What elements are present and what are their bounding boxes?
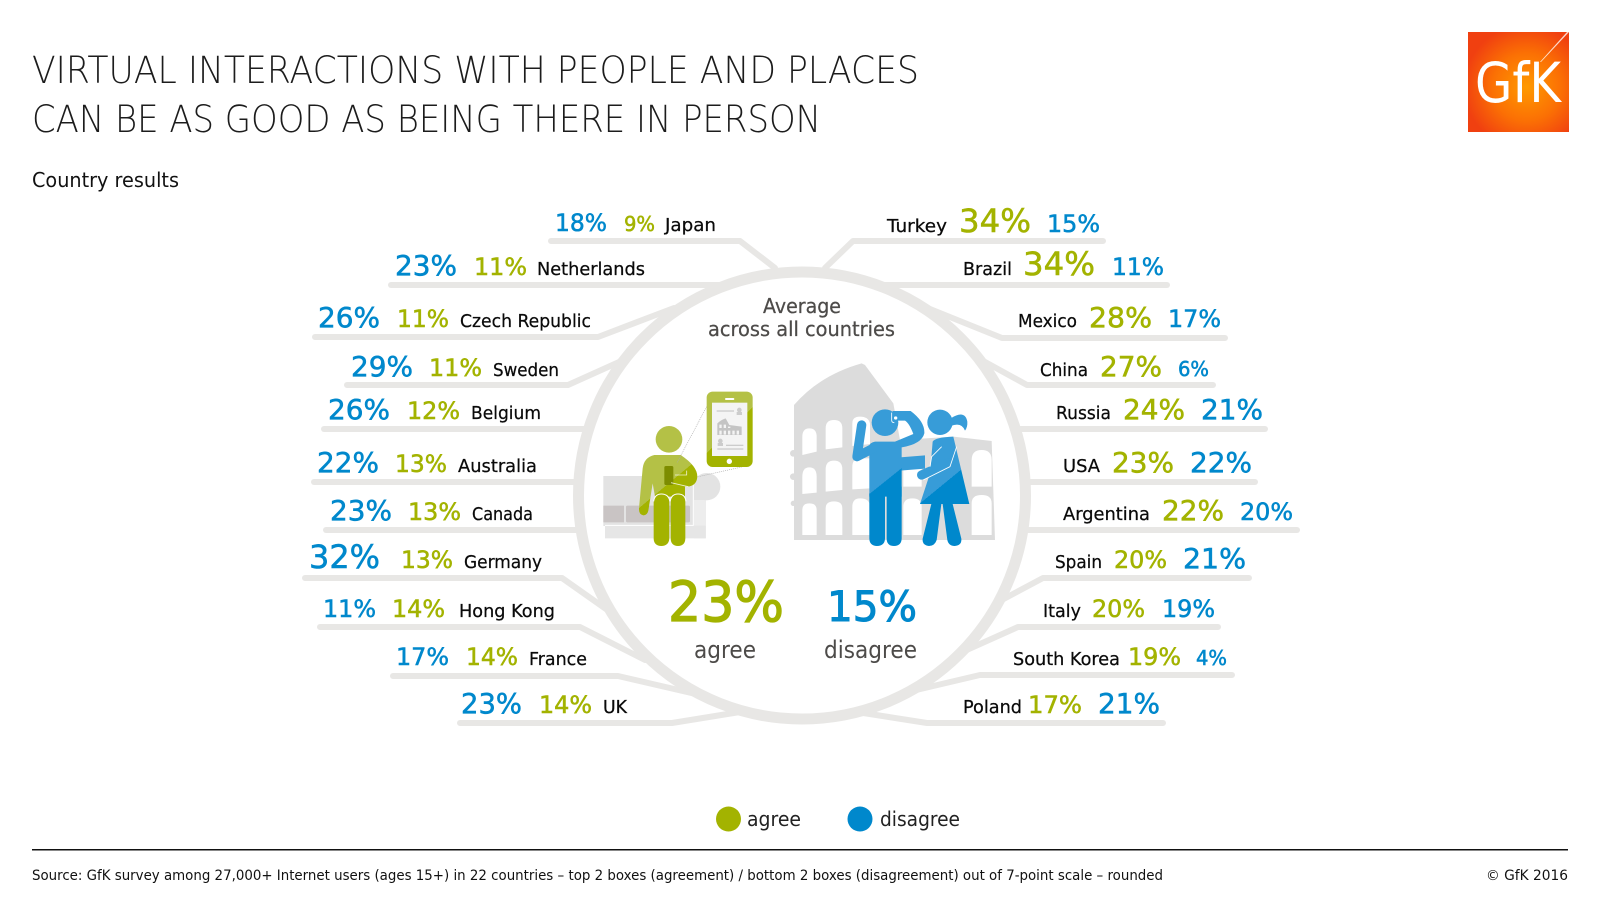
- row: USA: USA: [1063, 456, 1101, 477]
- row: Hong Kong: 14%: [392, 595, 445, 623]
- icon: person on sofa with tablet: [603, 392, 753, 546]
- stat: agree: [668, 570, 784, 664]
- row: Turkey: [825, 202, 1103, 268]
- row: Canada: [326, 494, 582, 530]
- logo: GfK: GfK: [1475, 51, 1563, 115]
- logo: GfK: [1468, 32, 1569, 132]
- icon: dotted zoom lines: [677, 407, 742, 477]
- row: Netherlands: [391, 249, 722, 285]
- circle ring: [578, 272, 1026, 719]
- row: Germany: 13%: [401, 546, 453, 574]
- stat: agree: 23%: [668, 570, 784, 634]
- icon: man taking a selfie: [857, 409, 925, 546]
- row: Netherlands: Netherlands: [537, 259, 645, 280]
- stat: disagree: [824, 582, 917, 664]
- row: China: 27%: [1100, 350, 1162, 383]
- stat: disagree: disagree: [824, 636, 917, 664]
- row: Hong Kong: 11%: [323, 595, 376, 623]
- row: Mexico: 17%: [1168, 305, 1221, 333]
- centre heading: across all countries: [708, 317, 895, 341]
- row: Czech Republic: [315, 301, 674, 337]
- row: South Korea: South Korea: [1013, 649, 1120, 670]
- row: Russia: Russia: [1056, 403, 1111, 424]
- row: Belgium: 12%: [407, 397, 460, 425]
- row: South Korea: 4%: [1196, 646, 1227, 670]
- row: France: France: [529, 649, 587, 670]
- row: Sweden: 11%: [429, 354, 482, 382]
- row: Sweden: [347, 350, 628, 385]
- row: Poland: 21%: [1098, 687, 1160, 720]
- row: Czech Republic: 26%: [318, 301, 380, 334]
- row: Argentina: [1023, 494, 1297, 530]
- row: Poland: 17%: [1028, 691, 1082, 719]
- row: Hong Kong: Hong Kong: [459, 601, 555, 622]
- title: CAN BE AS GOOD AS BEING THERE IN PERSON: [32, 98, 821, 141]
- row: France: [393, 643, 700, 695]
- row: France: 17%: [396, 643, 449, 671]
- row: Australia: 22%: [317, 446, 379, 479]
- row: Sweden: 29%: [351, 350, 413, 383]
- row: UK: 23%: [461, 687, 522, 720]
- row: Brazil: 34%: [1023, 245, 1095, 283]
- row: China: China: [1040, 360, 1088, 381]
- row: Turkey: 15%: [1047, 210, 1100, 238]
- stat: disagree: 15%: [827, 582, 917, 631]
- row: Brazil: 11%: [1112, 253, 1164, 281]
- row: Spain: Spain: [1055, 552, 1102, 573]
- row: Canada: 13%: [408, 498, 461, 526]
- title: VIRTUAL INTERACTIONS WITH PEOPLE AND PLACES: [32, 49, 919, 92]
- row: Netherlands: 11%: [474, 253, 527, 281]
- row: Australia: 13%: [395, 450, 447, 478]
- row: South Korea: [912, 643, 1232, 691]
- row: Hong Kong: [320, 595, 645, 660]
- row: Czech Republic: Czech Republic: [460, 311, 591, 332]
- row: Argentina: 22%: [1162, 494, 1224, 527]
- row: Canada: 23%: [330, 494, 392, 527]
- row: UK: 14%: [539, 691, 592, 719]
- row: Japan: [551, 209, 775, 268]
- row: Spain: 21%: [1183, 542, 1246, 575]
- icon: tablet: [707, 392, 753, 467]
- row: Italy: 20%: [1092, 595, 1145, 623]
- row: Australia: [314, 446, 580, 482]
- row: Japan: Japan: [664, 215, 716, 236]
- legend: agree: [747, 807, 801, 831]
- row: Russia: 21%: [1201, 393, 1263, 426]
- centre heading: Average: [763, 294, 841, 318]
- icon: sofa: [603, 473, 720, 538]
- row: Turkey: 34%: [959, 202, 1031, 240]
- row: Belgium: Belgium: [471, 403, 541, 424]
- row: China: 6%: [1178, 357, 1209, 381]
- row: Italy: [960, 595, 1218, 653]
- legend: [716, 806, 960, 832]
- subtitle: Country results: [32, 168, 179, 192]
- row: Canada: Canada: [472, 504, 533, 525]
- row: Brazil: Brazil: [963, 259, 1012, 280]
- row: Spain: [998, 542, 1249, 602]
- row: Poland: [857, 687, 1163, 723]
- row: USA: [1024, 446, 1255, 482]
- row: Poland: Poland: [963, 697, 1022, 718]
- row: Australia: Australia: [458, 456, 537, 477]
- legend: disagree: [880, 807, 960, 831]
- row: Mexico: [930, 301, 1225, 338]
- row: Sweden: Sweden: [493, 360, 559, 381]
- icon: woman: [920, 410, 969, 546]
- title: [32, 49, 919, 141]
- row: Germany: Germany: [464, 552, 542, 573]
- row: Argentina: Argentina: [1063, 504, 1150, 525]
- footer rule: [32, 849, 1568, 850]
- row: Mexico: Mexico: [1018, 311, 1077, 332]
- row: Belgium: 26%: [328, 393, 390, 426]
- row: Germany: [305, 538, 606, 609]
- row: USA: 23%: [1112, 446, 1174, 479]
- source note: Source: GfK survey among 27,000+ Internet users (ages 15+) in 22 countries – top 2 boxes (agreement) / bottom 2 boxes (disagreement) out of 7-point scale – rounded: [32, 868, 1163, 884]
- row: UK: [460, 687, 746, 723]
- row: Japan: 9%: [624, 212, 655, 236]
- row: USA: 22%: [1190, 446, 1252, 479]
- row: Russia: 24%: [1123, 393, 1185, 426]
- icon: tourists at the Colosseum: [790, 363, 995, 546]
- stat: agree: agree: [694, 636, 756, 664]
- row: Belgium: [324, 393, 587, 429]
- copyright: © GfK 2016: [1486, 868, 1568, 884]
- row: China: [976, 350, 1213, 385]
- row: Turkey: Turkey: [886, 216, 947, 237]
- row: UK: UK: [603, 697, 628, 718]
- row: South Korea: 19%: [1128, 643, 1181, 671]
- row: Brazil: [880, 245, 1167, 285]
- row: Mexico: 28%: [1089, 301, 1152, 334]
- icon: Colosseum: [790, 363, 995, 540]
- row: Japan: 18%: [555, 209, 607, 237]
- row: Germany: 32%: [309, 538, 380, 576]
- row: Netherlands: 23%: [395, 249, 457, 282]
- icon: seated person: [639, 426, 697, 546]
- row: Spain: 20%: [1114, 546, 1167, 574]
- row: Czech Republic: 11%: [397, 305, 449, 333]
- row: Argentina: 20%: [1240, 498, 1293, 526]
- row: France: 14%: [466, 643, 518, 671]
- centre heading: [708, 294, 895, 341]
- row: Russia: [1017, 393, 1265, 429]
- row: Italy: Italy: [1043, 601, 1081, 622]
- row: Italy: 19%: [1162, 595, 1215, 623]
